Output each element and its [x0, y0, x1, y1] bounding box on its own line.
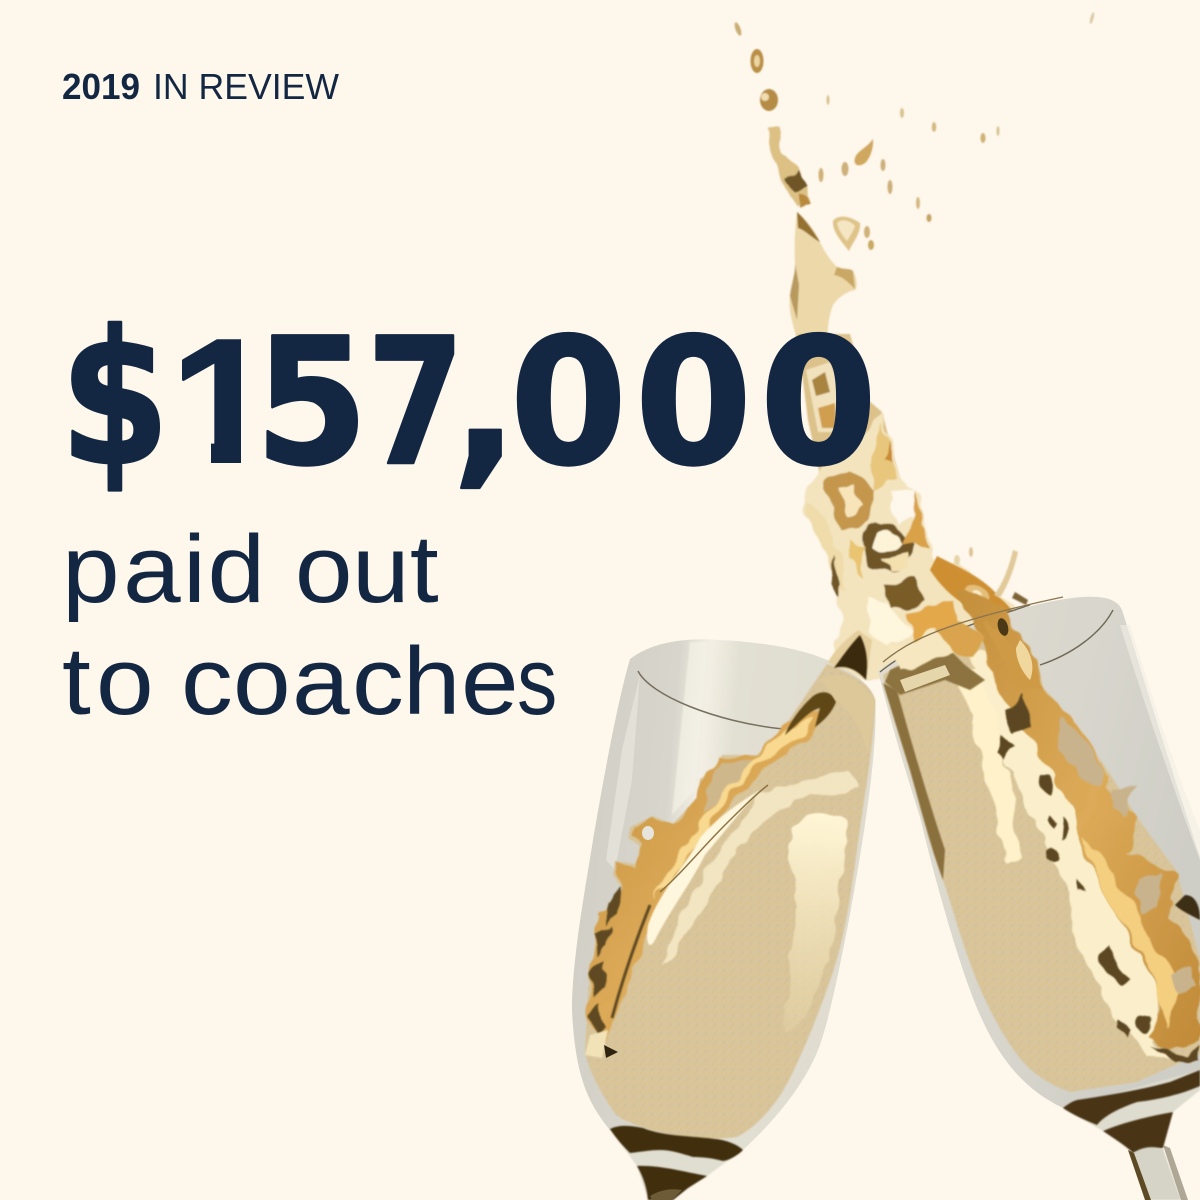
big number: $157,000: 7: [367, 302, 464, 505]
right champagne flute: [878, 590, 1200, 1200]
left flute dark ripples: [590, 890, 620, 1035]
stem: [1133, 1147, 1181, 1200]
glass bowl: [572, 639, 876, 1156]
big number: $157,000: 1: [170, 302, 279, 501]
rim line across splash: [883, 597, 1063, 662]
glass bowl: [878, 597, 1200, 1108]
big number: $157,000: [71, 320, 870, 492]
champagne splash: [733, 12, 1095, 690]
stem base dark band: [1063, 1070, 1200, 1125]
glass between stem bands: [618, 1140, 745, 1200]
rim crest splash: [885, 645, 985, 695]
stem base dark bands: [610, 1126, 743, 1161]
glass upper reflection: [672, 642, 708, 815]
spray above right glass: [954, 547, 1028, 605]
left flute ring droplet: [642, 826, 654, 840]
big number: $157,000: 0: [760, 302, 877, 505]
right flute left shadow band: [883, 683, 945, 880]
champagne in left flute: [585, 664, 875, 1139]
lower splash mass: [803, 410, 1040, 690]
glass rim back line: [638, 671, 783, 729]
big number: $157,000: ,: [452, 302, 518, 505]
heading: 2019 in review: IN REVIEW: [153, 66, 339, 107]
big number: $157,000: $: [60, 291, 170, 507]
left champagne flute: [572, 630, 876, 1200]
upper gold chain: [985, 620, 1045, 690]
heading: 2019 in review: [62, 66, 339, 107]
big number: $157,000: 0: [510, 302, 627, 505]
subheading: paid out to coaches: to coache: [62, 628, 519, 735]
glass between stem bands: [1063, 1070, 1200, 1131]
glass edge reflection: [1120, 625, 1200, 860]
big number: $157,000: 5: [255, 300, 368, 504]
subheading: paid out to coaches: [62, 516, 557, 735]
dark pockets: [998, 695, 1200, 1060]
upper stream body: [789, 212, 857, 340]
right flute cream foam: [970, 650, 1170, 1058]
champagne in right flute: [883, 630, 1200, 1092]
big number: $157,000: 0: [635, 302, 752, 505]
spray droplets: [733, 12, 1095, 251]
glass rim front line: [880, 605, 1113, 672]
left flute gold splash: [588, 706, 823, 1040]
subheading: paid out to coaches: s: [517, 627, 557, 735]
gold bright core: [1083, 830, 1185, 1030]
subheading: paid out to coaches: paid out: [62, 516, 439, 623]
heading: 2019 in review: 2019: [62, 66, 140, 107]
left flute bright highlight: [785, 817, 848, 1040]
right flute gold cascade: [960, 590, 1200, 1050]
translucent pockets: [1058, 715, 1195, 995]
left flute white foam streak: [647, 790, 760, 945]
top-right dark fold: [785, 692, 836, 735]
gold chain over rim: [930, 556, 1035, 660]
right flute highlight: [950, 665, 1020, 865]
stream behind digit: [797, 334, 900, 480]
upper stream tail: [768, 126, 811, 209]
